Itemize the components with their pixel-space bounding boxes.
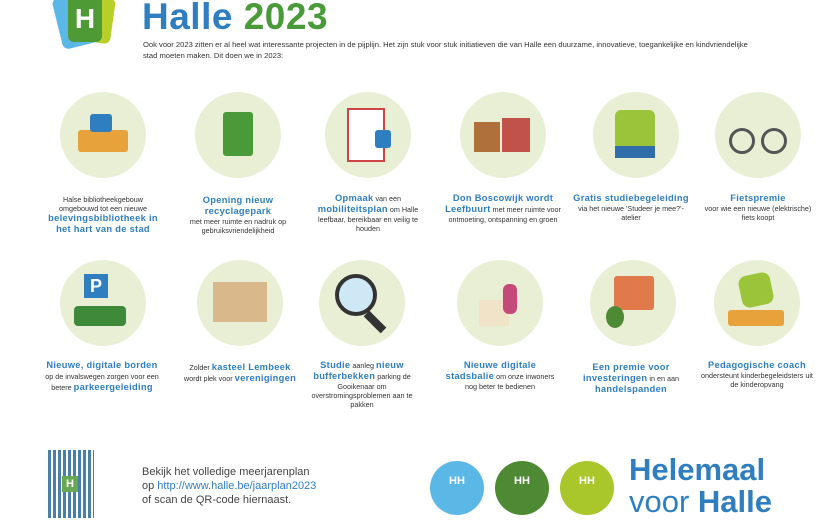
footer text	[142, 466, 316, 506]
text: Nieuwe digitale stadsbalie om onze inwoners nog beter te bedienen	[446, 360, 554, 391]
intro text: Ook voor 2023 zitten er al heel wat interessante projecten in de pijplijn. Het zijn stuk voor stuk initiatieven die van Halle een duurzame, innovatieve, toegankelijke en kindvriendelijke stad moeten maken. Dit doen we in 2023:	[143, 40, 748, 60]
text: Studie aanleg nieuw bufferbekken parking de Gooikenaar om overstromingsproblemen aan te pakken	[311, 360, 413, 409]
text: Gratis studiebegeleiding	[573, 193, 689, 203]
icon: parking sign	[60, 260, 146, 346]
smiley logos: HH	[579, 475, 595, 487]
footer text: of scan de QR-code hiernaast.	[142, 494, 291, 506]
footer text: Bekijk het volledige meerjarenplan	[142, 466, 310, 478]
QR code: H	[66, 478, 74, 490]
icon: bike	[715, 92, 801, 178]
text: Pedagogische coach ondersteunt kinderbegeleidsters uit de kinderopvang	[701, 360, 813, 389]
icon: study	[593, 92, 679, 178]
icon: mobility plan	[325, 92, 411, 178]
captions row 2: op de invalswegen zorgen voor een betere parkeergeleiding	[45, 372, 159, 392]
text: met meer ruimte en nadruk op gebruiksvriendelijkheid	[190, 217, 286, 235]
captions row 2: Nieuwe, digitale borden	[46, 360, 158, 370]
text: Fietspremie	[730, 193, 786, 203]
logo	[52, 0, 116, 49]
text: Een premie voor investeringen in en aan handelspanden	[583, 362, 679, 394]
icon: shop	[590, 260, 676, 346]
captions row 1: Halse bibliotheekgebouw omgebouwd tot een nieuwe belevingsbibliotheek in het hart van de stad	[48, 195, 158, 234]
text: Don Boscowijk wordt Leefbuurt met meer ruimte voor ontmoeting, ontspanning en groen	[445, 193, 561, 224]
smiley logos: HH	[449, 475, 465, 487]
slogan	[629, 452, 772, 519]
text: Opening nieuw recyclagepark	[203, 195, 273, 216]
icon: magnifier	[319, 260, 405, 346]
slogan: voor Halle	[629, 484, 772, 519]
icon circles	[60, 92, 801, 346]
slogan: Helemaal	[629, 452, 765, 487]
icon: houses	[460, 92, 546, 178]
smiley logos: HH	[514, 475, 530, 487]
QR code	[48, 450, 94, 518]
text: voor wie een nieuwe (elektrische) fiets koopt	[705, 204, 811, 222]
text: Zolder kasteel Lembeek wordt plek voor verenigingen	[184, 362, 296, 383]
text: Opmaak van een mobiliteitsplan om Halle leefbaar, bereikbaar en veilig te houden	[318, 193, 418, 233]
text: via het nieuwe 'Studeer je mee?'-atelier	[578, 204, 684, 222]
icon: castle	[197, 260, 283, 346]
icon: parking sign: P	[90, 276, 102, 296]
icon: digital desk	[457, 260, 543, 346]
logo: H	[75, 3, 95, 34]
captions row 2	[45, 360, 159, 392]
icon: coach	[714, 260, 800, 346]
footer text: op http://www.halle.be/jaarplan2023	[142, 480, 316, 492]
icon: library	[60, 92, 146, 178]
icon: recycle bin	[195, 92, 281, 178]
smiley logos	[430, 461, 614, 515]
